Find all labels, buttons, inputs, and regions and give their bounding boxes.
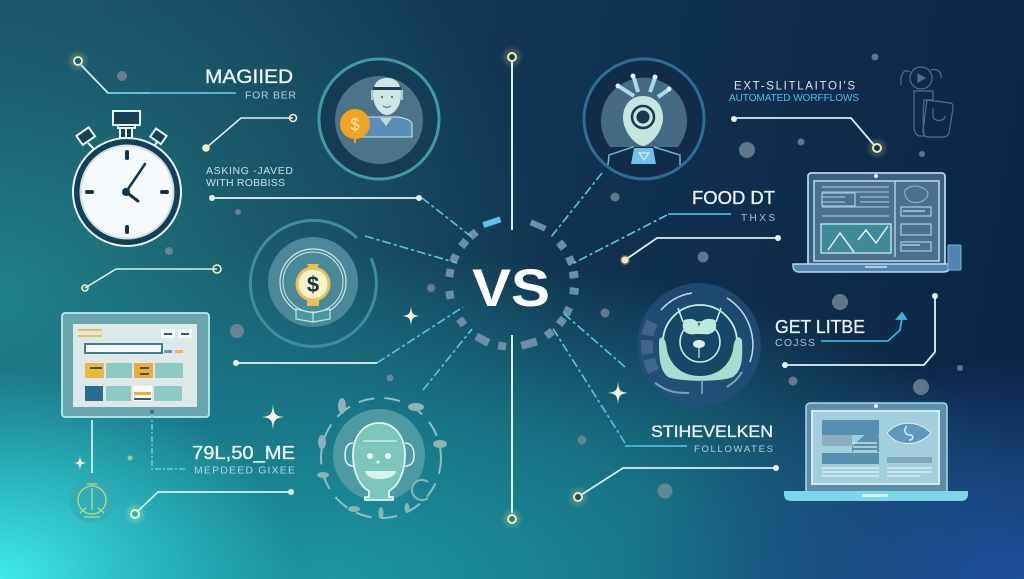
label: THXS: THXS [741,213,775,224]
icon: dollar money bag [250,220,376,346]
label: COJSS: COJSS [775,337,815,349]
heading: 79L,50_ME: 79L,50_ME [192,443,295,464]
icon: dashboard tablet [62,313,209,417]
connector: below followates [572,446,779,504]
icon: outline device robot [901,67,953,137]
arrow: growth [821,313,906,341]
VS badge with dashed ring [445,217,579,351]
heading: GET LITBE: GET LITBE [775,316,865,337]
connector: top left [72,54,236,93]
heading: MAGIIED: MAGIIED [205,66,293,88]
connector: bottom left [128,489,294,520]
label: MEPDEED GIXEE: MEPDEED GIXEE [194,464,295,476]
icon: brain orb [637,283,761,407]
connector: food dt underline [622,214,781,264]
text: ASKING-JAVED: ASKING -JAVED [206,165,293,177]
heading: EXT-SLITLAITOI'S: EXT-SLITLAITOI'S [734,80,855,92]
connector: top right [731,116,884,154]
dashed connectors from VS [365,173,667,443]
label: AUTOMATED WORFFLOWS: AUTOMATED WORFFLOWS [729,93,859,104]
connector: above robot money [203,114,296,151]
sparkles [73,306,628,471]
icon: agent with coin [319,59,439,179]
label: FOLLOWATES: FOLLOWATES [694,444,773,455]
icon: dashboard laptop [793,173,961,272]
icon: dollar money bag: $ [307,272,319,297]
VS badge with dashed ring: VS [472,259,550,318]
icon: stopwatch [73,111,181,246]
small yellow particle [128,456,132,460]
heading: FOOD DT: FOOD DT [692,188,775,208]
connector: mid-left [233,360,377,366]
icon: analytics laptop [784,403,968,501]
icon: small stopwatch [70,478,114,522]
icon: robot head with antennae [584,59,704,179]
icon: robot face [317,398,447,519]
heading: STIHEVELKEN: STIHEVELKEN [651,422,773,441]
connector: tablet to text [92,410,186,473]
connector: stopwatch low [82,265,221,291]
label: FOR BER: FOR BER [245,90,296,102]
connector: right elbow [782,293,938,368]
central divider line [506,50,518,526]
connector: long left [209,195,422,201]
text: WITH ROBBISS: WITH ROBBISS [206,177,285,189]
floating gray particles [117,54,963,498]
icon: agent with coin: $ [350,115,360,134]
